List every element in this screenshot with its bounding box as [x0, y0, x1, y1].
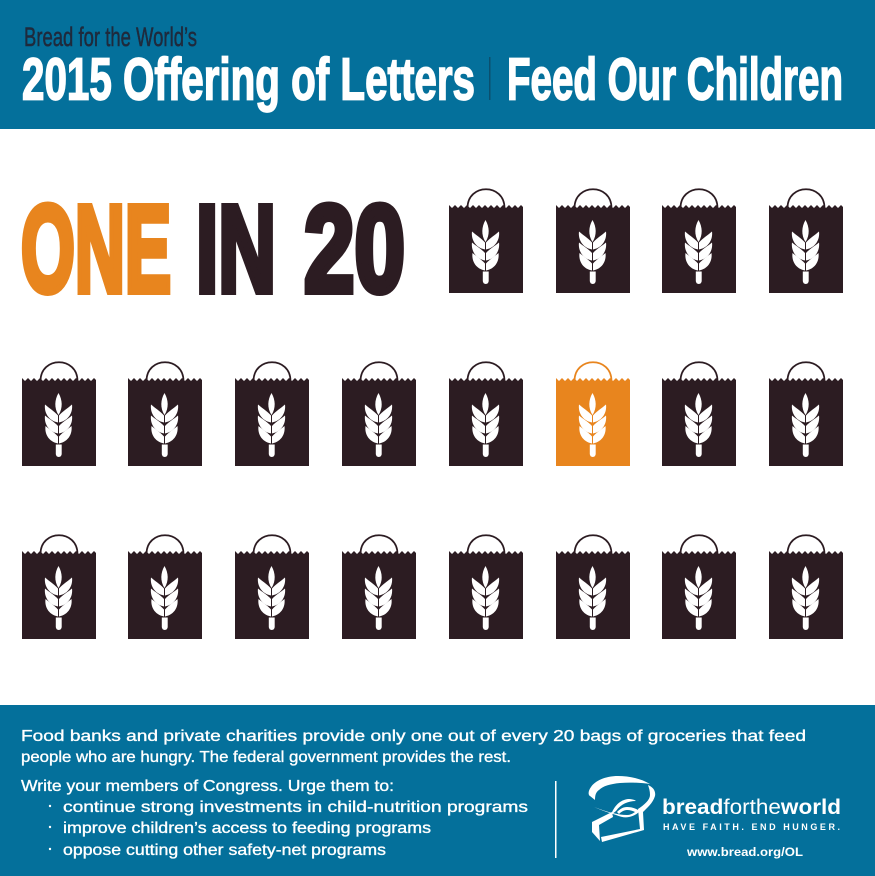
- header band: [0, 0, 875, 129]
- call to action: continue strong investments in child-nutrition programs: [63, 799, 528, 816]
- footer statement: Food banks and private charities provide only one out of every 20 bags of groceries that feed: [21, 728, 806, 745]
- bag row 1: [449, 189, 843, 293]
- bag row 3: [22, 535, 843, 639]
- header divider: [489, 57, 490, 100]
- header title left: 2015 Offering of Letters: [22, 46, 475, 112]
- logo: bread for the world: [589, 776, 841, 859]
- headline: one in 20: [21, 182, 405, 318]
- wordmark: breadfortheworld: [662, 796, 841, 819]
- call to action: Write your members of Congress. Urge them to:: [21, 778, 394, 795]
- call to action: improve children’s access to feeding programs: [63, 820, 431, 837]
- call to action: oppose cutting other safety-net programs: [63, 842, 386, 859]
- call to action: [21, 778, 528, 859]
- icon: bread with fish: [589, 776, 655, 842]
- footer divider: [555, 781, 556, 858]
- headline number 20: 20: [304, 182, 405, 318]
- bag row 2: [22, 362, 843, 466]
- header kicker: Bread for the World’s: [24, 22, 197, 52]
- bag grid: [22, 189, 843, 639]
- website url: www.bread.org/OL: [686, 847, 803, 859]
- highlighted orange bag: [556, 362, 630, 466]
- headline word ONE: ONE: [21, 182, 171, 318]
- footer statement: people who are hungry. The federal government provides the rest.: [21, 749, 511, 766]
- tagline: HAVE FAITH. END HUNGER.: [663, 822, 840, 832]
- footer statement: [21, 728, 806, 766]
- headline word IN: IN: [196, 182, 276, 318]
- footer panel: [0, 705, 875, 876]
